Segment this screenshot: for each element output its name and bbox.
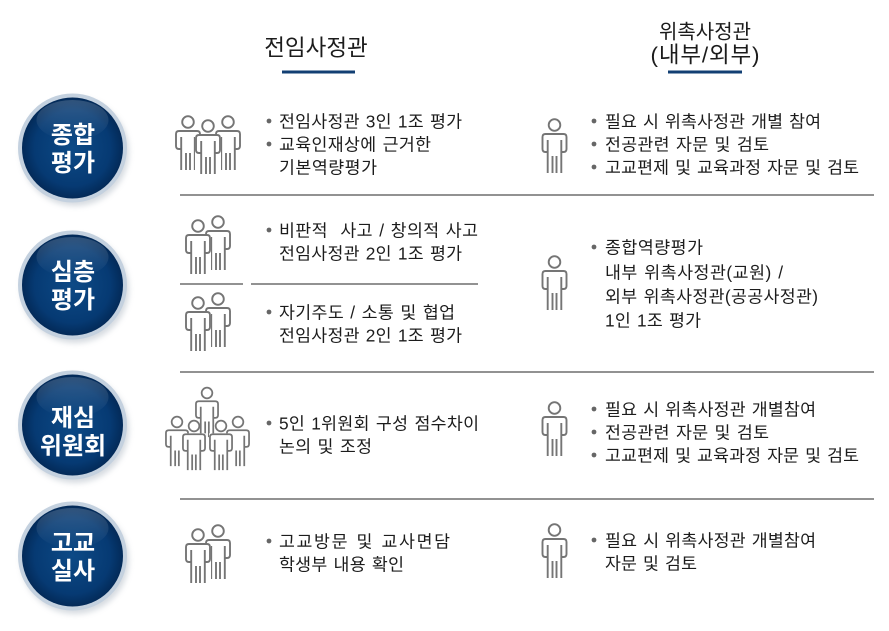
badge: 종합 평가: 종합 — [51, 122, 95, 149]
text block: row 3 appointed: 고교편제 및 교육과정 자문 및 검토 — [605, 446, 859, 466]
text block: row 4 appointed: 필요 시 위촉사정관 개별참여 — [605, 530, 816, 550]
badge: 고교 실사 — [18, 502, 129, 614]
badge: 고교 실사: 고교 — [51, 530, 95, 557]
heading: full-time admissions officers: 전임사정관 — [264, 36, 368, 60]
badge: 종합 평가: 평가 — [51, 150, 95, 177]
text block: row 2a full-time: 비판적 사고 / 창의적 사고 — [279, 220, 478, 240]
text block: row 2a full-time — [267, 220, 478, 264]
text block: row 3 full-time: 5인 1위원회 구성 점수차이 — [279, 414, 479, 434]
text block: row 2b full-time — [267, 302, 462, 346]
text block: row 1 appointed — [592, 112, 859, 178]
badge: 심층 평가: 평가 — [51, 287, 95, 314]
badge: 재심 위원회 — [18, 370, 129, 483]
badge: 심층 평가 — [18, 230, 129, 343]
icon: single officer, row 4 — [542, 524, 566, 578]
badge: 심층 평가: 심층 — [51, 259, 95, 286]
icon: pair of officers, row 4 — [185, 525, 230, 585]
text block: row 1 full-time: 교육인재상에 근거한 — [279, 134, 431, 154]
heading: appointed admissions officers: (내부/외부) — [650, 42, 760, 68]
text block: row 2b full-time: 자기주도 / 소통 및 협업 — [279, 302, 455, 322]
text block: row 3 appointed — [592, 400, 859, 466]
text block: row 1 appointed: 전공관련 자문 및 검토 — [605, 134, 769, 154]
badge: 고교 실사: 실사 — [51, 558, 95, 585]
badge: 재심 위원회: 재심 — [51, 405, 95, 432]
heading: full-time admissions officers — [264, 36, 368, 74]
text block: row 2a full-time: 전임사정관 2인 1조 평가 — [279, 244, 462, 264]
text block: row 1 full-time: 전임사정관 3인 1조 평가 — [279, 112, 462, 132]
heading: appointed admissions officers: 위촉사정관 — [659, 20, 751, 44]
text block: row 4 full-time — [267, 532, 450, 574]
heading: appointed admissions officers — [650, 20, 760, 74]
text block: row 3 appointed: 필요 시 위촉사정관 개별참여 — [605, 400, 816, 420]
icon: committee of five officers — [165, 388, 250, 472]
text block: row 2 appointed: 1인 1조 평가 — [605, 310, 701, 330]
text block: row 1 appointed: 고교편제 및 교육과정 자문 및 검토 — [605, 158, 859, 178]
icon: pair of officers, row 2b — [185, 293, 230, 353]
text block: row 2 appointed: 외부 위촉사정관(공공사정관) — [605, 286, 818, 306]
text block: row 2 appointed: 종합역량평가 — [605, 238, 703, 258]
text block: row 2 appointed: 내부 위촉사정관(교원) / — [605, 262, 783, 282]
text block: row 4 full-time: 고교방문 및 교사면담 — [279, 532, 450, 552]
badge: 재심 위원회: 위원회 — [40, 433, 106, 460]
icon: single officer, row 2 — [542, 256, 566, 310]
text block: row 4 appointed: 자문 및 검토 — [605, 554, 697, 574]
text block: row 4 full-time: 학생부 내용 확인 — [279, 554, 404, 574]
text block: row 3 full-time: 논의 및 조정 — [279, 436, 372, 456]
text block: row 2 appointed — [592, 238, 818, 330]
icon: single officer, row 3 — [542, 402, 566, 456]
text block: row 2b full-time: 전임사정관 2인 1조 평가 — [279, 326, 462, 346]
text block: row 1 full-time: 기본역량평가 — [279, 158, 377, 178]
text block: row 3 full-time — [267, 414, 479, 456]
text block: row 4 appointed — [592, 530, 816, 574]
icon: pair of officers, row 2a — [185, 216, 230, 276]
text block: row 3 appointed: 전공관련 자문 및 검토 — [605, 422, 769, 442]
text block: row 1 full-time — [267, 112, 462, 178]
icon: group of three officers — [176, 116, 240, 176]
badge: 종합 평가 — [18, 94, 129, 206]
icon: single officer, row 1 — [542, 119, 566, 173]
text block: row 1 appointed: 필요 시 위촉사정관 개별 참여 — [605, 112, 821, 132]
